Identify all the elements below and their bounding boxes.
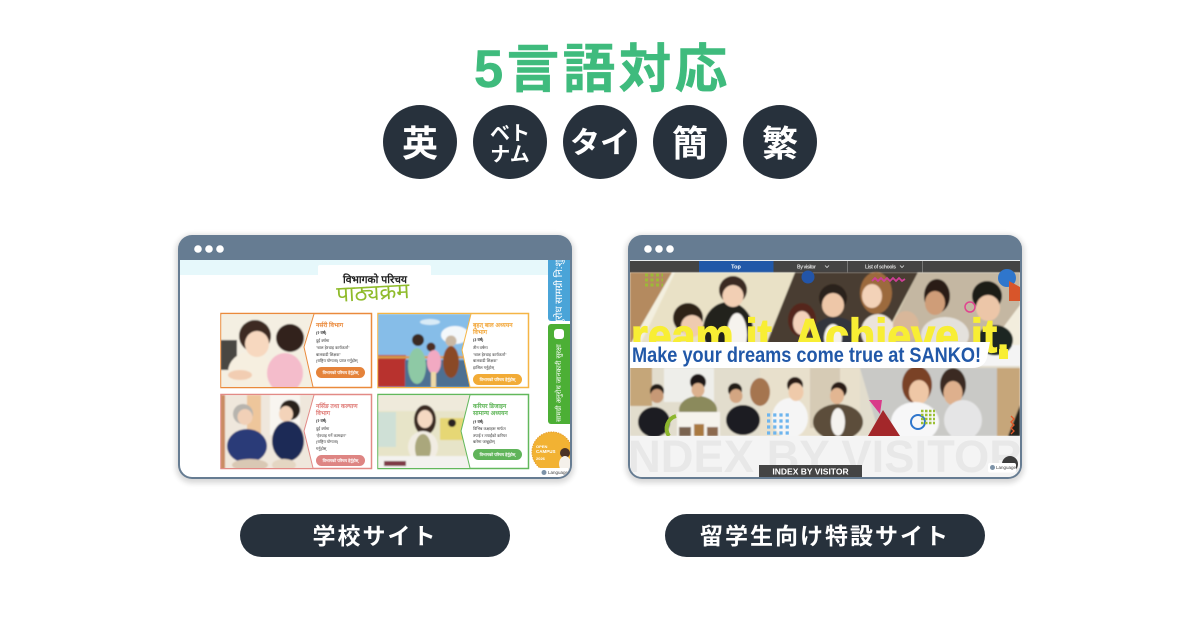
navigation bar: By visitor: [797, 264, 816, 270]
language button: Language: [996, 465, 1017, 470]
card: comprehensive child studies: (३ वर्ष): [473, 337, 484, 342]
badge: Simplified Chinese: [653, 105, 727, 179]
badge: English: [383, 105, 457, 179]
side tab: blue application tab: अनुरोध सामग्री नि:शुल्क: [553, 247, 565, 333]
section label: INDEX BY VISITOR: [759, 465, 862, 477]
badge: open campus: 2026: [536, 456, 546, 461]
badge: Simplified Chinese: 簡: [672, 123, 708, 164]
heading: department introduction: पाठ्यक्रम: [336, 278, 411, 307]
card: nursery department: [221, 314, 372, 393]
section label: INDEX BY VISITOR: INDEX BY VISITOR: [772, 466, 849, 476]
language button: [988, 456, 1018, 472]
card: comprehensive child studies: विभाग: [472, 328, 488, 336]
decorative shapes on upper photo: [645, 269, 1020, 312]
language badges: [383, 105, 817, 179]
card: nursery department: बालवाडी शिक्षक": [316, 352, 341, 357]
photo band: upper students: [630, 272, 1020, 358]
navigation bar: [630, 260, 1020, 272]
decorative shapes on lower photo: [667, 400, 1014, 436]
card: nursing and welfare: "हेरचाह गर्ने कामदार": [316, 433, 347, 438]
slogan: Dream it. Achieve it.: ream it. Achieve it.: [631, 309, 1009, 362]
panel: school site browser window: [176, 235, 574, 483]
section background text: INDEX BY VISITOR: NDEX BY VISITOR: [628, 431, 1022, 482]
card: career design general studies: विभागको परिचय हेर्नुहोस्: [479, 452, 516, 458]
card: nursing and welfare: (२ वर्ष): [316, 418, 327, 423]
photo band: lower students: [630, 366, 1020, 442]
language button: Language: [548, 470, 569, 475]
card: nursing and welfare: दुई वर्षमा: [316, 426, 330, 432]
caption: special site for international students: [665, 514, 985, 557]
card: comprehensive child studies: [378, 314, 528, 388]
card: nursing and welfare: नर्सिङ तथा कल्याण: [315, 402, 358, 410]
yellow period accent: [999, 349, 1008, 359]
card: nursery department: विभागको परिचय हेर्नुहोस्: [322, 370, 359, 376]
card: comprehensive child studies: "बाल हेरचाह कार्यकर्ता": [473, 352, 507, 357]
navigation bar: Top: [731, 264, 741, 270]
card: career design general studies: विभिन्न कक्षाहरू मार्फत: [473, 426, 506, 431]
side tab: green LINE tab: सामग्री अनुरोध जानकारी सुरक्षा: [554, 344, 563, 422]
badge: Vietnamese: ベト: [490, 123, 530, 145]
card: nursing and welfare: (राष्ट्रिय योग्यता): [316, 439, 339, 444]
card: nursing and welfare: [221, 394, 372, 471]
badge: Thai: タイ: [570, 127, 630, 160]
panel: international student site browser window: [626, 235, 1024, 483]
badge: Traditional Chinese: 繁: [762, 123, 798, 164]
card: career design general studies: (१ वर्ष): [473, 419, 484, 424]
caption: special site for international students: 留学生向け特設サイト: [700, 523, 950, 549]
card: career design general studies: बारेमा जान्नुहोस्: [473, 439, 496, 445]
card: career design general studies: करियर डिजाइन: [472, 402, 507, 410]
card: nursery department: दुई वर्षमा: [316, 338, 330, 344]
card: nursery department: (२ वर्ष): [316, 330, 327, 335]
badge: English: 英: [402, 123, 438, 164]
card: comprehensive child studies: विभागको परिचय हेर्नुहोस्: [479, 377, 516, 383]
card: comprehensive child studies: तीन वर्षमा: [473, 345, 489, 350]
side tab: blue application tab: [548, 260, 570, 321]
caption: school site: 学校サイト: [312, 523, 438, 549]
badge: Thai: [563, 105, 637, 179]
caption: school site: [240, 514, 510, 557]
card: nursing and welfare: गर्नुहोस्: [316, 446, 327, 452]
card: career design general studies: तपाईं र तपाईंको करियर: [473, 433, 507, 438]
card: nursing and welfare: विभाग: [315, 409, 331, 417]
card: nursery department: (राष्ट्रिय योग्यता) प्राप्त गर्नुहोस्: [316, 358, 359, 364]
card: comprehensive child studies: बालवाडी शिक्षक": [473, 358, 498, 363]
badge: open campus: OPEN: [536, 444, 547, 449]
language button: [538, 468, 569, 477]
card: comprehensive child studies: बृहत् बाल अध्ययन: [472, 323, 513, 329]
card: nursing and welfare: विभागको परिचय हेर्नुहोस्: [322, 458, 359, 464]
heading: department introduction: [336, 273, 410, 302]
title: 5言語対応: [474, 40, 731, 99]
card: nursery department: "बाल हेरचाह कार्यकर्ता": [316, 345, 350, 350]
heading: department introduction: विभागको परिचय: [342, 273, 408, 286]
card: nursery department: नर्सरी विभाग: [315, 321, 344, 329]
badge: Vietnamese: ナム: [490, 144, 530, 166]
card: comprehensive child studies: हासिल गर्नुहोस्: [473, 365, 495, 371]
badge: open campus: [532, 432, 572, 472]
badge: Vietnamese: [473, 105, 547, 179]
banner: Make your dreams come true at SANKO!: Make your dreams come true at SANKO!: [632, 344, 981, 367]
card: career design general studies: [378, 394, 528, 469]
card: career design general studies: सामान्य अध्ययन: [472, 411, 508, 417]
side tab: green LINE tab: [548, 324, 570, 424]
badge: Traditional Chinese: [743, 105, 817, 179]
navigation bar: List of schools: [865, 264, 896, 270]
badge: open campus: CAMPUS: [536, 449, 556, 454]
